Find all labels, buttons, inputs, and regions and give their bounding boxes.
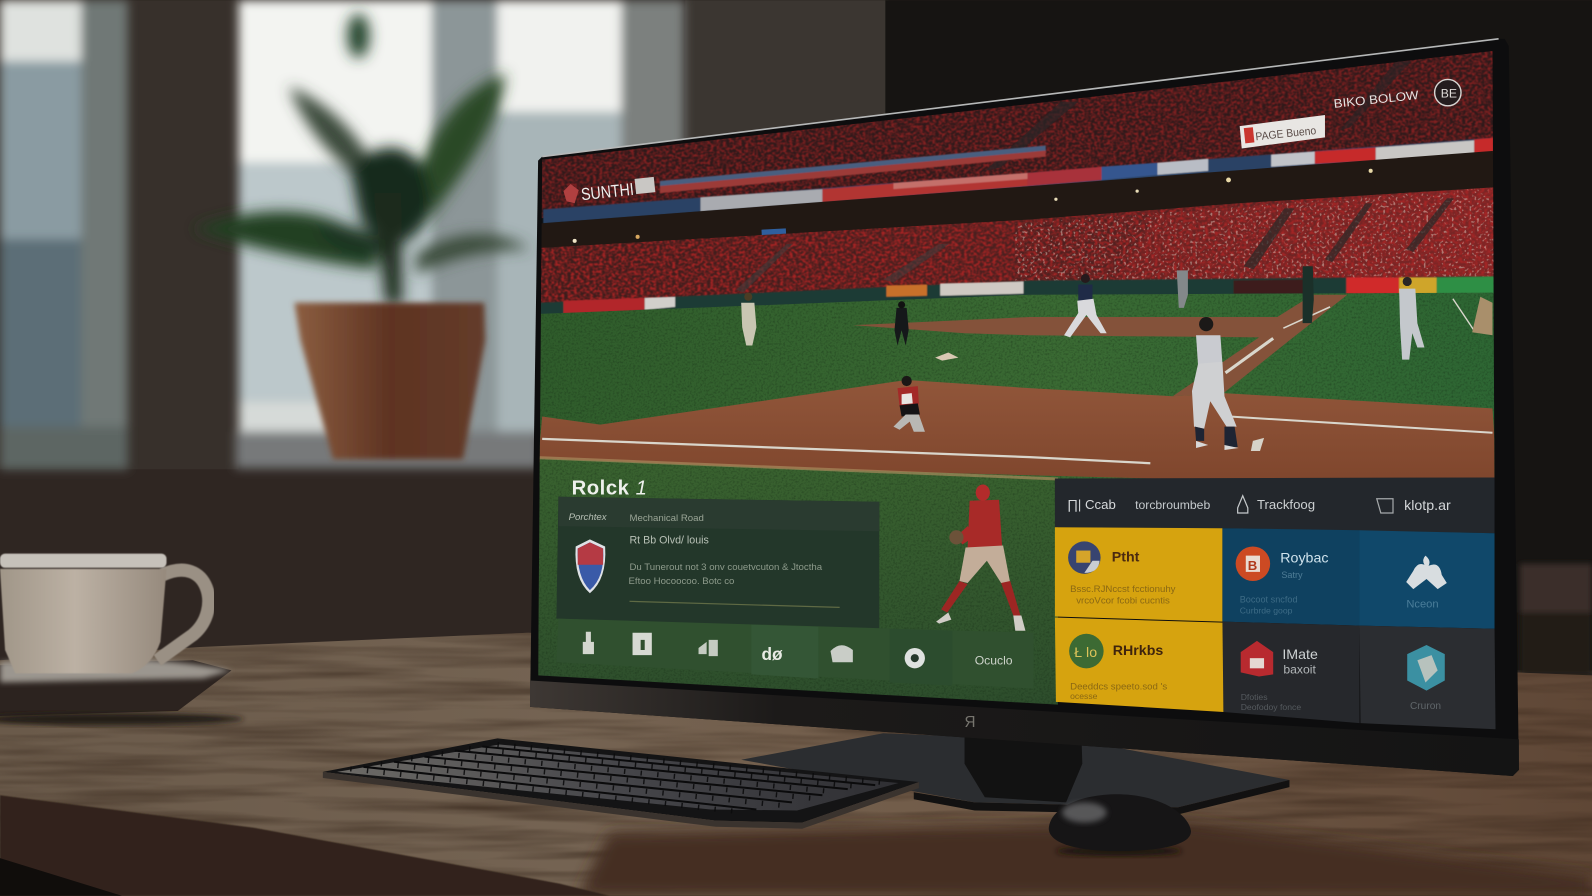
toolbar icon 4: dø — [761, 644, 783, 664]
white sponsor card: PAGE Bueno — [1255, 125, 1317, 143]
blue tile 2 — [1359, 530, 1495, 629]
table front edge — [0, 795, 609, 896]
blue tile 1: Roybac — [1280, 551, 1328, 567]
lower deck crowd — [538, 187, 1498, 305]
monitor logo: Я — [965, 714, 976, 731]
pitcher's mound base — [935, 353, 958, 361]
keyboard — [323, 738, 919, 829]
dark tile 1: Deofodoy fonce — [1241, 702, 1301, 712]
team label: BIKO BOLOW — [1333, 88, 1420, 111]
white sponsor card — [1240, 115, 1325, 148]
tracking icon — [1238, 496, 1248, 513]
blue tile 2: Nceon — [1406, 598, 1439, 610]
toolbar icon 5 — [831, 645, 853, 662]
yellow tile 2: Ł lo — [1074, 645, 1097, 661]
yellow tile 1: vrcoVcor fcobi cucntis — [1076, 595, 1170, 606]
dark tile 1: Dfoties — [1241, 692, 1268, 702]
yellow tile 1: Ptht — [1112, 550, 1140, 566]
broadcast logo — [563, 177, 655, 204]
menu header bar: ∏| Ccab — [1067, 497, 1116, 512]
monitor housing — [530, 39, 1519, 776]
table shaded front right — [579, 823, 1592, 896]
panel heading: Rolck 1 — [572, 478, 647, 500]
banner strip upper — [543, 137, 1498, 224]
menu header bar: klotp.ar — [1404, 498, 1451, 514]
yellow tile 2: RHrkbs — [1113, 643, 1163, 659]
batter in white — [1192, 317, 1264, 451]
game info card — [556, 497, 879, 630]
toolbar icon 6 — [905, 648, 925, 668]
game info card: Du Tunerout not 3 onv couetvcuton & Jtoctha — [629, 562, 823, 573]
dark tile 1 — [1222, 622, 1359, 723]
home icon — [1377, 499, 1393, 513]
badge icon: BE — [1441, 87, 1457, 101]
wooden table — [0, 633, 1592, 896]
far right shelf — [1520, 564, 1592, 675]
toolbar icon 2 — [633, 633, 652, 655]
progress line — [629, 601, 840, 607]
broadcast logo: SUNTHI — [580, 179, 635, 204]
icon toolbar — [556, 619, 1034, 689]
saucer — [0, 658, 244, 725]
yellow tile 1: Bssc.RJNccst fcctionuhy — [1070, 584, 1176, 595]
toolbar icon 3 — [699, 640, 718, 656]
badge icon — [1435, 79, 1461, 106]
upper deck crowd — [538, 46, 1498, 219]
fielder in red jersey — [936, 485, 1025, 631]
right menu grid — [1055, 477, 1496, 729]
dark tile 1: IMate — [1282, 647, 1318, 663]
blue tile 1 — [1222, 528, 1359, 626]
foul lines — [542, 299, 1492, 463]
toolbar label: Ocuclo — [975, 653, 1013, 667]
dark tile 2 — [1359, 626, 1496, 729]
menu header bar: torcbroumbeb — [1135, 498, 1210, 512]
menu header bar: Trackfoog — [1257, 497, 1315, 512]
screen overlay: scoreboard labels — [563, 79, 1461, 204]
window: blurred city view — [0, 0, 684, 469]
card header text: Porchtex — [569, 512, 608, 523]
yellow tile 2 — [1055, 618, 1223, 712]
toolbar icon 1 — [583, 632, 594, 654]
coffee cup on saucer — [0, 554, 244, 725]
catcher in red — [893, 376, 925, 432]
monitor stand and base — [741, 726, 1289, 815]
fielders — [741, 266, 1424, 360]
menu header bar — [1055, 477, 1495, 533]
tan backstop panel — [1472, 297, 1492, 335]
outfield wall and ads — [538, 276, 1498, 315]
cup handle — [157, 570, 209, 660]
game info card: Eftoo Hocoocoo. Botc co — [628, 576, 734, 587]
dark tile 1: baxoit — [1283, 662, 1316, 676]
yellow tile 1 — [1055, 527, 1222, 622]
plant leaves — [193, 13, 530, 305]
bottom grass — [538, 458, 1058, 711]
outfield grass — [538, 293, 1498, 488]
terracotta pot — [294, 303, 485, 459]
dark concourse — [542, 150, 1493, 248]
cup body — [0, 554, 167, 673]
people icon — [1406, 556, 1447, 589]
game info card: Rt Bb Olvd/ louis — [629, 534, 709, 546]
yellow tile 2: ocesse — [1070, 691, 1098, 701]
blue tile 1: Bocoot sncfod — [1240, 594, 1298, 604]
blue tile 1: Satry — [1281, 570, 1303, 580]
game info card: Mechanical Road — [629, 513, 704, 524]
team shield — [575, 539, 605, 593]
infield dirt — [538, 295, 1498, 488]
plant in terracotta pot — [193, 13, 530, 459]
screen: stadium scene — [538, 46, 1498, 711]
blue tile 1: Curbrde goop — [1240, 605, 1293, 615]
hex badge — [1407, 645, 1445, 691]
yellow tile 2: Deeddcs speeto.sod 's — [1070, 682, 1167, 693]
bottom-left game panel — [556, 478, 1034, 689]
computer mouse — [1049, 794, 1191, 856]
dark tile 2: Cruron — [1410, 701, 1441, 712]
blue tile 1: B — [1248, 558, 1257, 573]
